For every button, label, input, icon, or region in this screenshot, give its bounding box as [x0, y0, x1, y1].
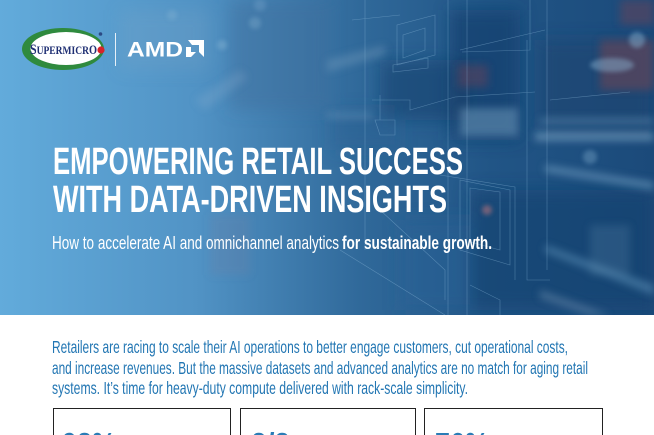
hero photo: blurred store shelves	[120, 0, 654, 315]
logo: Supermicro	[22, 28, 105, 70]
subtitle: How to accelerate AI and omnichannel analytics	[52, 232, 339, 253]
logo: Supermicro: SUPERMICRO	[30, 42, 97, 58]
title	[53, 141, 463, 221]
stat card 1	[54, 408, 230, 435]
stat card 2	[240, 408, 416, 435]
intro text block	[52, 337, 588, 398]
hero photo: data circuit overlay lines	[340, 0, 630, 315]
stat cards row	[54, 408, 602, 435]
subtitle: for sustainable growth.	[342, 232, 492, 253]
stat card 3	[424, 408, 602, 435]
logo: AMD: AMD	[127, 38, 183, 62]
intro text block: systems. It’s time for heavy-duty compute delivered with rack-scale simplicity.	[52, 378, 468, 398]
title: EMPOWERING RETAIL SUCCESS	[53, 141, 463, 183]
logo: AMD	[127, 38, 204, 62]
title: WITH DATA-DRIVEN INSIGHTS	[53, 179, 447, 221]
panel: hero banner	[0, 0, 654, 315]
divider between logos	[115, 33, 116, 66]
